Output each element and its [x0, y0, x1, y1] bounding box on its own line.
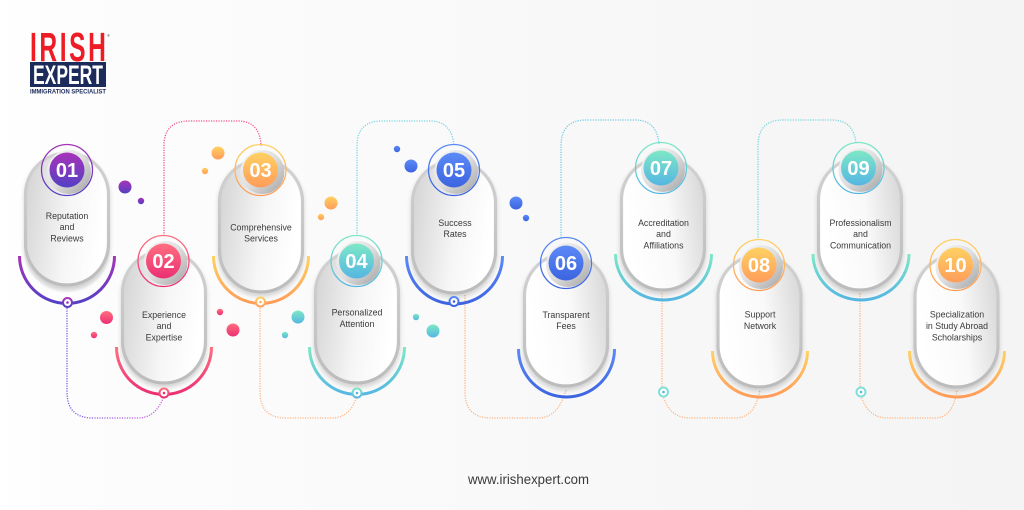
step 01: 01	[56, 160, 78, 182]
step 06: Transparent	[542, 310, 590, 320]
step 03: Services	[244, 234, 278, 244]
step 07: 07	[650, 158, 672, 180]
step 01: and	[60, 222, 74, 232]
step 06	[518, 238, 614, 397]
step 07: Accreditation	[638, 218, 689, 228]
step 10	[910, 240, 1004, 397]
step 04	[310, 236, 404, 398]
step 04: Attention	[340, 319, 374, 329]
step 10: Specialization	[930, 310, 984, 320]
step 04: 04	[345, 251, 368, 273]
step 01: Reviews	[50, 234, 84, 244]
step 05: Rates	[444, 229, 467, 239]
logo: IRISH	[30, 25, 108, 71]
step 10: 10	[944, 255, 967, 277]
step 10: Scholarships	[932, 332, 983, 342]
step 09	[813, 142, 909, 396]
step 02: 02	[152, 251, 175, 273]
step 09: 09	[847, 158, 870, 180]
step 08	[712, 240, 808, 397]
step 06: 06	[555, 253, 577, 275]
step 05: 05	[443, 160, 465, 182]
step 10: in Study Abroad	[926, 321, 988, 331]
dotted connectors	[67, 120, 957, 418]
step 05	[406, 144, 502, 306]
decorative dots	[91, 146, 529, 338]
step 07	[616, 142, 712, 396]
step 01: Reputation	[46, 211, 88, 221]
step 04: Personalized	[332, 308, 383, 318]
step 02: Expertise	[146, 332, 182, 342]
step 08: 08	[748, 255, 770, 277]
logo: EXPERT	[33, 60, 103, 90]
step 09: Professionalism	[829, 218, 892, 228]
step 02: Experience	[142, 310, 186, 320]
step 09: and	[853, 229, 868, 239]
step 08: Network	[744, 321, 777, 331]
step 09: Communication	[830, 240, 891, 250]
step 03	[214, 144, 308, 306]
step 07: and	[656, 229, 671, 239]
step 08: Support	[745, 310, 776, 320]
step 03: Comprehensive	[230, 222, 292, 232]
logo: ®	[107, 33, 110, 38]
step 07: Affiliations	[644, 240, 684, 250]
step 05: Success	[438, 218, 472, 228]
step 02	[116, 236, 212, 398]
step 03: 03	[249, 160, 272, 182]
logo: IMMIGRATION SPECIALIST	[30, 90, 106, 96]
logo	[30, 25, 110, 96]
step 01	[20, 144, 114, 307]
step 02: and	[157, 321, 171, 331]
website footer: www.irishexpert.com	[467, 472, 589, 487]
step 06: Fees	[556, 321, 576, 331]
